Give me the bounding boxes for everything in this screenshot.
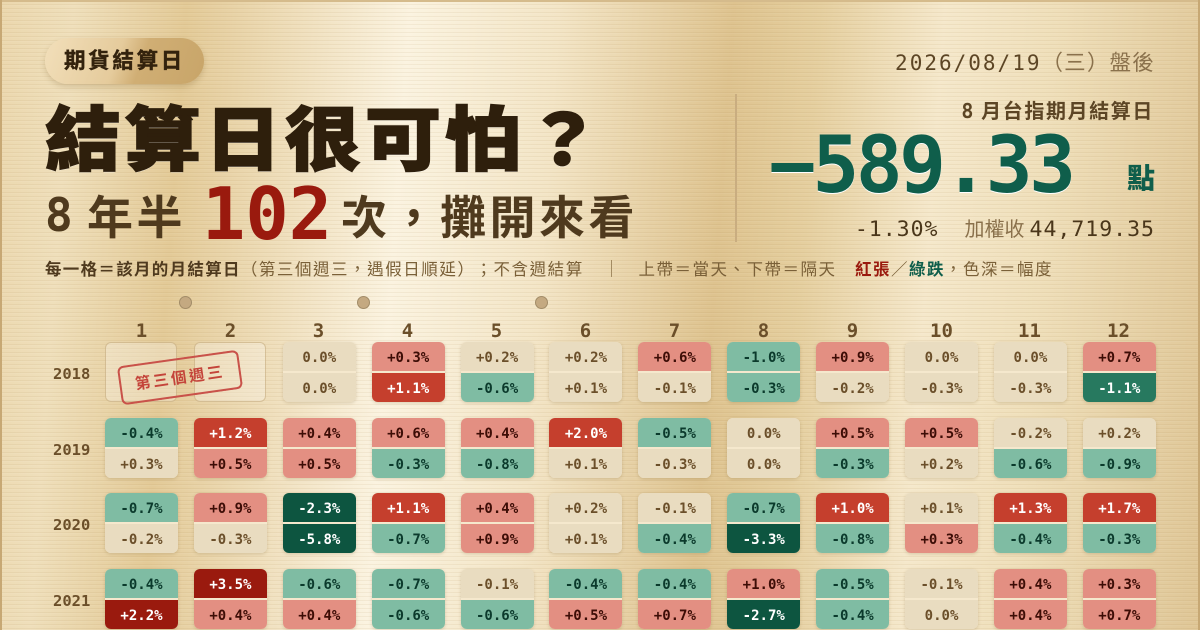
percent change and index close: -1.30% 加權收44,719.35 xyxy=(855,213,1155,242)
heatmap grid: +0.7% xyxy=(1098,350,1140,366)
heatmap grid: +1.3% xyxy=(1009,501,1051,517)
heatmap grid: +0.1% xyxy=(565,532,607,548)
heatmap grid: -0.3% xyxy=(920,381,963,397)
date: 2026/08/19（三）盤後 xyxy=(895,46,1155,77)
title: 結算日很可怕？ xyxy=(45,83,605,185)
heatmap grid: 0.0% xyxy=(747,426,781,442)
big points figure: −589.33 xyxy=(769,121,1073,211)
heatmap grid: +0.7% xyxy=(1098,608,1140,624)
text: 8 xyxy=(758,320,769,342)
points unit: 點 xyxy=(1127,157,1155,197)
heatmap grid: -0.3% xyxy=(209,532,251,548)
heatmap grid: +0.9% xyxy=(476,532,518,548)
heatmap grid: +1.2% xyxy=(209,426,251,442)
year labels: 2018 xyxy=(53,365,90,383)
text: 6 xyxy=(580,320,591,342)
heatmap grid: 0.0% xyxy=(747,457,781,473)
heatmap grid: -0.4% xyxy=(120,577,163,593)
heatmap grid: -1.1% xyxy=(1098,381,1140,397)
heatmap grid: +1.1% xyxy=(387,381,429,397)
heatmap grid: -0.1% xyxy=(654,381,696,397)
heatmap grid: +0.6% xyxy=(654,350,696,366)
heatmap grid xyxy=(104,342,1157,630)
tag pill xyxy=(45,38,204,84)
heatmap grid: +0.3% xyxy=(120,457,163,473)
heatmap grid: 0.0% xyxy=(925,608,958,624)
text: 9 xyxy=(847,320,858,342)
heatmap grid: +0.2% xyxy=(920,457,963,473)
subtitle: 102 xyxy=(202,172,332,256)
text: 2 xyxy=(225,320,236,342)
heatmap grid: -0.6% xyxy=(1009,457,1051,473)
heatmap grid: -2.3% xyxy=(298,501,340,517)
text: 3 xyxy=(313,320,324,342)
heatmap grid: +2.0% xyxy=(565,426,607,442)
text: 11 xyxy=(1018,320,1041,342)
heatmap grid: -0.2% xyxy=(1009,426,1051,442)
text: 12 xyxy=(1107,320,1130,342)
heatmap grid: +0.3% xyxy=(1098,577,1140,593)
heatmap grid: +0.2% xyxy=(476,350,518,366)
heatmap grid: -0.7% xyxy=(120,501,163,517)
heatmap grid: +0.5% xyxy=(565,608,607,624)
heatmap grid: +3.5% xyxy=(209,577,251,593)
heatmap grid: -0.7% xyxy=(387,577,429,593)
heatmap grid: -0.4% xyxy=(654,577,696,593)
calendar pin rings xyxy=(179,296,192,309)
heatmap grid: +1.0% xyxy=(832,501,874,517)
heatmap grid: +0.5% xyxy=(298,457,340,473)
text: 2021 xyxy=(53,592,90,610)
heatmap grid: +0.4% xyxy=(298,426,340,442)
heatmap grid: +0.5% xyxy=(832,426,874,442)
heatmap grid: 0.0% xyxy=(302,381,336,397)
heatmap grid: -0.3% xyxy=(654,457,696,473)
vertical divider xyxy=(735,94,737,242)
heatmap grid: -1.0% xyxy=(743,350,785,366)
heatmap grid: -0.6% xyxy=(476,381,518,397)
subtitle: 次，攤開來看 xyxy=(341,182,638,248)
heatmap grid: +0.7% xyxy=(654,608,696,624)
heatmap grid: -0.8% xyxy=(832,532,874,548)
heatmap grid: +0.4% xyxy=(209,608,251,624)
text: 2019 xyxy=(53,441,90,459)
heatmap grid: -0.3% xyxy=(743,381,785,397)
subtitle: 年半 xyxy=(87,182,186,248)
heatmap grid: +0.2% xyxy=(565,501,607,517)
heatmap grid: +0.1% xyxy=(565,457,607,473)
heatmap grid: 0.0% xyxy=(302,350,336,366)
heatmap grid: -5.8% xyxy=(298,532,340,548)
heatmap grid: +0.4% xyxy=(1009,608,1051,624)
heatmap grid: 0.0% xyxy=(1014,350,1047,366)
heatmap grid: -0.2% xyxy=(832,381,874,397)
heatmap grid: -0.1% xyxy=(654,501,696,517)
heatmap grid: -0.7% xyxy=(743,501,785,517)
text: 4 xyxy=(402,320,413,342)
heatmap grid: +0.2% xyxy=(565,350,607,366)
heatmap grid: -0.4% xyxy=(120,426,163,442)
heatmap grid: -2.7% xyxy=(743,608,785,624)
text: 7 xyxy=(669,320,680,342)
subtitle xyxy=(45,172,638,256)
subtitle: 8 xyxy=(45,188,76,242)
stamp: third Wednesday xyxy=(117,350,243,405)
heatmap grid: +0.4% xyxy=(1009,577,1051,593)
heatmap grid: -0.4% xyxy=(565,577,607,593)
text: 5 xyxy=(491,320,502,342)
heatmap grid: +0.1% xyxy=(920,501,963,517)
tag pill: 期貨結算日 xyxy=(64,44,185,75)
heatmap grid: -0.3% xyxy=(1098,532,1140,548)
heatmap grid: 0.0% xyxy=(925,350,958,366)
settlement label: 8 月台指期月結算日 xyxy=(961,95,1154,124)
heatmap grid: -0.1% xyxy=(920,577,963,593)
heatmap grid: -3.3% xyxy=(743,532,785,548)
stamp: third Wednesday: 第三個週三 xyxy=(134,360,226,394)
legend text: 紅張／綠跌，色深＝幅度 xyxy=(855,256,1053,280)
heatmap grid: +0.3% xyxy=(920,532,963,548)
heatmap grid: -0.6% xyxy=(298,577,340,593)
heatmap grid: -0.4% xyxy=(654,532,696,548)
heatmap grid: +0.3% xyxy=(387,350,429,366)
heatmap grid: +0.2% xyxy=(1098,426,1140,442)
heatmap grid: +1.1% xyxy=(387,501,429,517)
heatmap grid: +0.5% xyxy=(209,457,251,473)
heatmap grid: -0.3% xyxy=(832,457,874,473)
heatmap grid: -0.3% xyxy=(387,457,429,473)
heatmap grid: -0.3% xyxy=(1009,381,1051,397)
month headers: 1 xyxy=(136,320,147,342)
heatmap grid: +0.4% xyxy=(476,501,518,517)
heatmap grid: +0.5% xyxy=(920,426,963,442)
heatmap grid: +0.4% xyxy=(476,426,518,442)
heatmap grid: -0.8% xyxy=(476,457,518,473)
legend text: 每一格＝該月的月結算日（第三個週三，遇假日順延）；不含週結算 xyxy=(45,256,584,280)
legend text: 上帶＝當天、下帶＝隔天 xyxy=(638,256,836,280)
heatmap grid: +1.0% xyxy=(743,577,785,593)
heatmap grid: +0.1% xyxy=(565,381,607,397)
text: 10 xyxy=(930,320,953,342)
heatmap grid: -0.1% xyxy=(476,577,518,593)
text: 2020 xyxy=(53,516,90,534)
heatmap grid: -0.7% xyxy=(387,532,429,548)
heatmap grid: +0.9% xyxy=(209,501,251,517)
heatmap grid: +1.7% xyxy=(1098,501,1140,517)
heatmap grid: -0.4% xyxy=(1009,532,1051,548)
heatmap grid: -0.6% xyxy=(387,608,429,624)
heatmap grid: -0.4% xyxy=(832,608,874,624)
heatmap grid: +0.6% xyxy=(387,426,429,442)
heatmap grid: +2.2% xyxy=(120,608,163,624)
heatmap grid: -0.9% xyxy=(1098,457,1140,473)
legend text xyxy=(45,256,1053,280)
heatmap grid: -0.5% xyxy=(832,577,874,593)
heatmap grid: +0.9% xyxy=(832,350,874,366)
heatmap grid: +0.4% xyxy=(298,608,340,624)
heatmap grid: -0.5% xyxy=(654,426,696,442)
heatmap grid: -0.6% xyxy=(476,608,518,624)
heatmap grid: -0.2% xyxy=(120,532,163,548)
